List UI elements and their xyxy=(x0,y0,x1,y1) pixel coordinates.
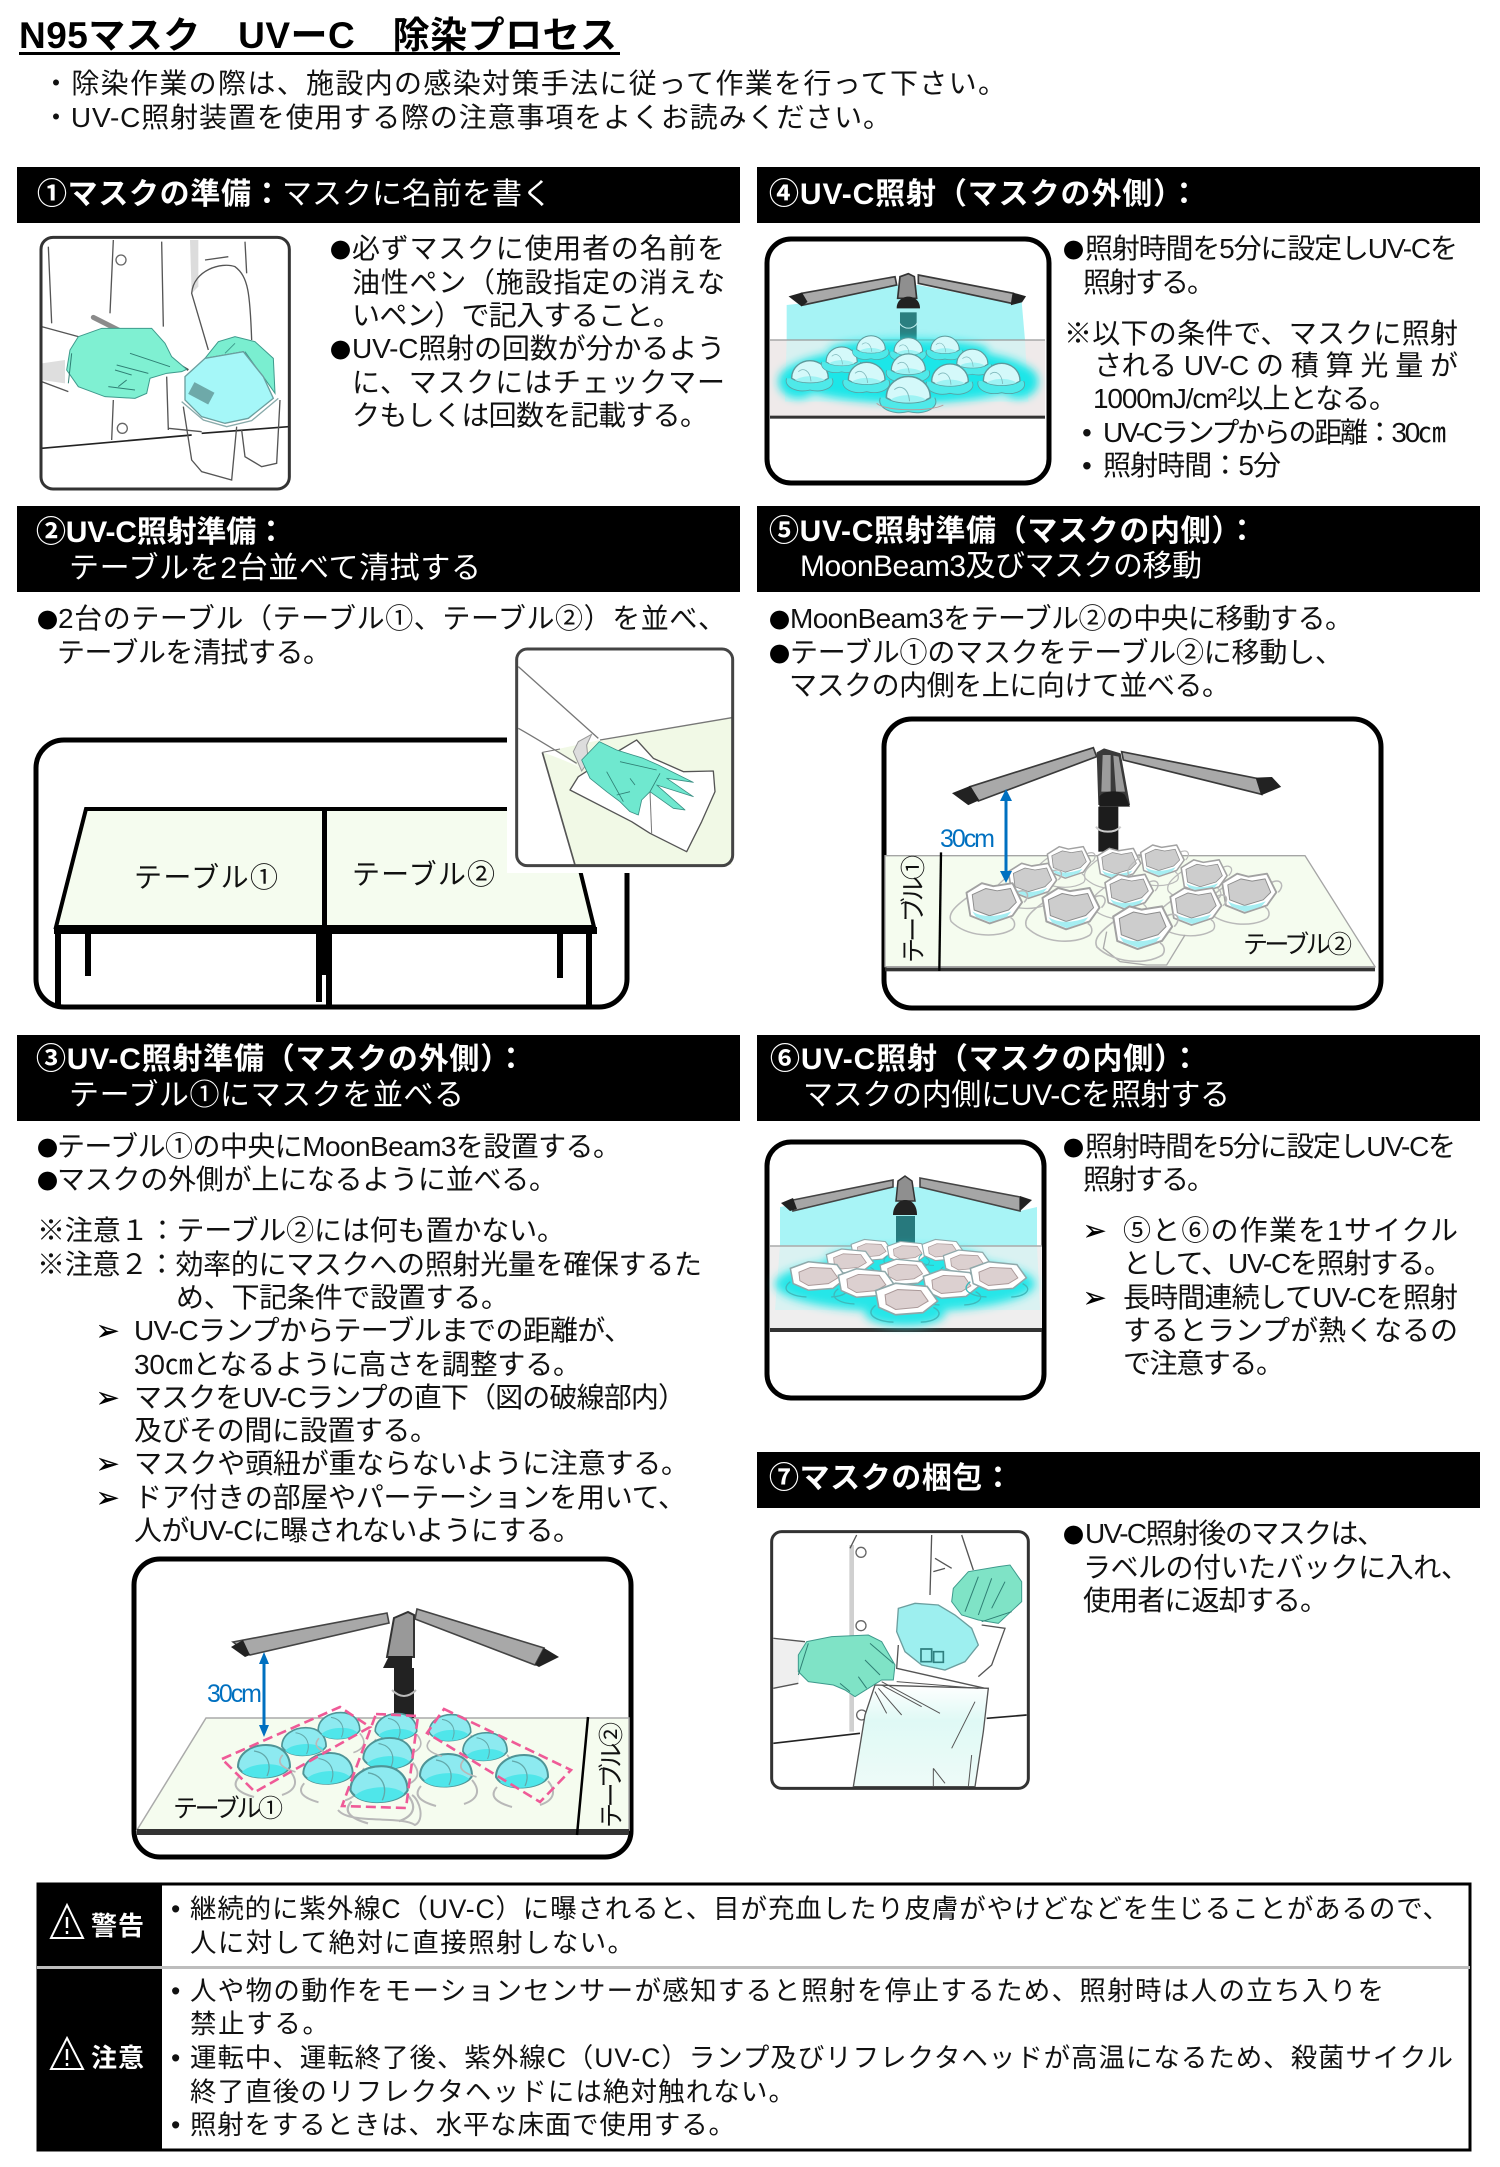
table 2 label xyxy=(577,1717,626,1835)
masks xyxy=(950,845,1282,965)
icon: hand writing on mask xyxy=(41,237,289,489)
lamp xyxy=(790,274,1025,308)
panel: step 1 header: ： xyxy=(252,178,282,211)
caution text: 終了直後のリフレクタヘッドには絶対触れない。 xyxy=(190,2077,795,2107)
step 3 instructions: UV-Cランプからテーブルまでの距離が、 xyxy=(134,1315,632,1346)
caution text: • xyxy=(171,2043,180,2073)
step 4 instructions: ● xyxy=(1063,235,1084,265)
step 3 instructions: ➢ xyxy=(96,1482,119,1513)
step 6 instructions: 長時間連続してUV-Cを照射 xyxy=(1123,1282,1458,1313)
step 7 instructions: ラベルの付いたバックに入れ、 xyxy=(1083,1552,1469,1583)
panel: step 1 header: マスクに名前を書く xyxy=(282,178,552,211)
step 7 instructions: 使用者に返却する。 xyxy=(1083,1585,1328,1616)
caution text: 照射をするときは、水平な床面で使用する。 xyxy=(190,2110,735,2140)
lamp xyxy=(231,1609,559,1718)
step 4 instructions: 照射時間を5分に設定しUV-Cを xyxy=(1085,233,1458,264)
step 3 instructions: マスクや頭紐が重ならないように注意する。 xyxy=(134,1448,689,1479)
dashed placement zones xyxy=(222,1707,571,1808)
step 3 instructions: め、下記条件で設置する。 xyxy=(176,1282,509,1313)
step 3 instructions: テーブル①の中央にMoonBeam3を設置する。 xyxy=(57,1131,621,1162)
step 1 instructions xyxy=(330,233,725,431)
step 1 instructions: いペン）で記入すること。 xyxy=(352,300,681,331)
diagram: two tables xyxy=(36,740,627,1007)
step 1 instructions: ● xyxy=(330,235,351,265)
step 6 instructions: するとランプが熱くなるの xyxy=(1123,1315,1458,1346)
intro notes xyxy=(42,68,1006,133)
panel: step 4 header xyxy=(757,167,1480,223)
step 4 instructions: 照射する。 xyxy=(1083,267,1215,298)
diagram: masks inner side on table 2 xyxy=(884,719,1381,1008)
step 6 instructions: 照射する。 xyxy=(1083,1164,1215,1195)
diagram: UV-C inner irradiation xyxy=(767,1142,1044,1398)
step 2 instructions xyxy=(37,603,726,668)
step 3 instructions: ➢ xyxy=(96,1315,119,1346)
panel: step 4 header: ④UV-C照射（マスクの外側）： xyxy=(769,178,1199,211)
step 7 instructions: UV-C照射後のマスクは、 xyxy=(1085,1518,1385,1549)
step 1 instructions: ● xyxy=(330,335,351,365)
lamp xyxy=(953,748,1280,852)
step 3 instructions: ※注意１：テーブル②には何も置かない。 xyxy=(37,1215,565,1246)
step 4 instructions: ※以下の条件で、マスクに照射 xyxy=(1064,318,1458,349)
step 5 instructions: マスクの内側を上に向けて並べる。 xyxy=(789,670,1230,701)
caution text: • xyxy=(171,2110,180,2140)
step 4 instructions: される UV-C の 積 算 光 量 が xyxy=(1094,350,1458,381)
warning and caution table xyxy=(37,1883,1470,2151)
step 3 instructions: ➢ xyxy=(96,1448,119,1479)
warning text: 継続的に紫外線C（UV-C）に曝されると、目が充血したり皮膚がやけどなどを生じることがあるので、 xyxy=(190,1894,1449,1924)
glow xyxy=(778,339,1038,403)
caution label xyxy=(51,2038,144,2073)
panel: step 6 header xyxy=(757,1035,1480,1121)
table 1 label: テーブル① xyxy=(900,855,928,963)
table 2 label: テーブル② xyxy=(598,1722,626,1828)
distance label: 30cm xyxy=(207,1680,262,1708)
icon: wiping table by hand xyxy=(507,640,739,873)
step 2 instructions: 2台のテーブル（テーブル①、テーブル②）を並べ、 xyxy=(58,603,726,634)
step 4 instructions: 1000mJ/cm²以上となる。 xyxy=(1093,383,1397,414)
caution label: 注意 xyxy=(91,2043,144,2073)
step 6 instructions: ⑤と⑥の作業を1サイクル xyxy=(1123,1215,1458,1246)
step 4 instructions: • xyxy=(1082,450,1092,481)
icon: packing mask into bag xyxy=(772,1532,1028,1788)
panel: step 3 header xyxy=(17,1035,740,1121)
step 1 instructions: 必ずマスクに使用者の名前を xyxy=(352,233,725,264)
panel: step 3 header: テーブル①にマスクを並べる xyxy=(69,1079,464,1112)
step 5 instructions xyxy=(769,603,1353,701)
diagram: masks outer side on table 1 xyxy=(134,1559,631,1857)
intro notes: ・UV-C照射装置を使用する際の注意事項をよくお読みください。 xyxy=(42,102,891,133)
panel: step 5 header: ⑤UV-C照射準備（マスクの内側）： xyxy=(769,515,1257,548)
table 2 label: テーブル② xyxy=(352,859,495,890)
title: N95マスク UVーC 除染プロセス xyxy=(19,15,617,56)
panel: step 2 header: ②UV-C照射準備： xyxy=(36,516,286,549)
warning text: • xyxy=(171,1894,180,1924)
step 5 instructions: ● xyxy=(769,605,790,635)
step 3 instructions: 及びその間に設置する。 xyxy=(134,1415,438,1446)
panel: step 1 header xyxy=(17,167,740,223)
warning text xyxy=(171,1894,1449,1958)
step 3 instructions: ➢ xyxy=(96,1382,119,1413)
step 3 instructions: 人がUV-Cに曝されないようにする。 xyxy=(134,1515,581,1546)
step 3 instructions: ● xyxy=(37,1166,58,1196)
warning label xyxy=(51,1905,144,1941)
step 3 instructions xyxy=(37,1131,702,1546)
glow xyxy=(775,1247,1035,1326)
table 1 label: テーブル① xyxy=(173,1795,283,1823)
table 2 label: テーブル② xyxy=(1243,931,1352,959)
step 5 instructions: ● xyxy=(769,639,790,669)
step 6 instructions: で注意する。 xyxy=(1123,1348,1284,1379)
step 6 instructions: ➢ xyxy=(1083,1215,1106,1246)
caution text: 人や物の動作をモーションセンサーが感知すると照射を停止するため、照射時は人の立ち入りを xyxy=(190,1976,1384,2006)
warning label: 警告 xyxy=(91,1911,144,1941)
step 6 instructions: ● xyxy=(1063,1133,1084,1163)
intro notes: ・除染作業の際は、施設内の感染対策手法に従って作業を行って下さい。 xyxy=(42,68,1006,99)
panel: step 5 header xyxy=(757,506,1480,592)
step 7 instructions xyxy=(1063,1518,1469,1616)
panel: step 6 header: マスクの内側にUV-Cを照射する xyxy=(803,1079,1230,1112)
table 1 label: テーブル① xyxy=(134,862,278,893)
panel: step 3 header: ③UV-C照射準備（マスクの外側）： xyxy=(36,1043,526,1076)
panel: step 7 header: ⑦マスクの梱包： xyxy=(769,1462,1013,1495)
step 3 instructions: ● xyxy=(37,1133,58,1163)
step 2 instructions: ● xyxy=(37,605,58,635)
step 3 instructions: マスクをUV-Cランプの直下（図の破線部内） xyxy=(134,1382,686,1413)
lamp xyxy=(781,1176,1032,1215)
caution text: 運転中、運転終了後、紫外線C（UV-C）ランプ及びリフレクタヘッドが高温になるため、殺菌サイクル xyxy=(190,2043,1453,2073)
step 3 instructions: マスクの外側が上になるように並べる。 xyxy=(57,1164,557,1195)
step 4 instructions: UV-Cランプからの距離：30㎝ xyxy=(1103,417,1446,448)
caution text: 禁止する。 xyxy=(190,2009,329,2039)
step 1 instructions: UV-C照射の回数が分かるよう xyxy=(352,333,725,364)
panel: step 2 header xyxy=(17,506,740,592)
panel: step 5 header: MoonBeam3及びマスクの移動 xyxy=(800,550,1202,583)
panel: step 6 header: ⑥UV-C照射（マスクの内側）： xyxy=(770,1043,1200,1076)
step 3 instructions: ※注意２：効率的にマスクへの照射光量を確保するた xyxy=(37,1249,702,1280)
step 1 instructions: 油性ペン（施設指定の消えな xyxy=(352,267,725,298)
panel: step 2 header: テーブルを2台並べて清拭する xyxy=(69,552,481,585)
step 7 instructions: ● xyxy=(1063,1520,1084,1550)
step 4 instructions: • xyxy=(1082,417,1092,448)
step 4 instructions xyxy=(1063,233,1458,481)
panel: step 7 header xyxy=(757,1452,1480,1508)
caution text: • xyxy=(171,1976,180,2006)
masks xyxy=(786,1240,1028,1322)
masks xyxy=(236,1713,553,1825)
arrow: 30cm distance xyxy=(259,1652,269,1737)
diagram: UV-C outer irradiation xyxy=(767,239,1049,483)
step 5 instructions: MoonBeam3をテーブル②の中央に移動する。 xyxy=(790,603,1353,634)
step 5 instructions: テーブル①のマスクをテーブル②に移動し、 xyxy=(790,637,1343,668)
step 4 instructions: 照射時間：5分 xyxy=(1103,450,1281,481)
step 1 instructions: に、マスクにはチェックマー xyxy=(352,367,725,398)
step 3 instructions: ドア付きの部屋やパーテーションを用いて、 xyxy=(134,1482,686,1513)
step 2 instructions: テーブルを清拭する。 xyxy=(57,637,331,668)
masks xyxy=(786,336,1025,413)
warning text: 人に対して絶対に直接照射しない。 xyxy=(190,1928,634,1958)
step 6 instructions: ➢ xyxy=(1083,1282,1106,1313)
step 6 instructions: 照射時間を5分に設定しUV-Cを xyxy=(1085,1131,1456,1162)
arrow: 30cm distance xyxy=(1000,789,1012,883)
distance label: 30cm xyxy=(940,825,995,853)
step 6 instructions xyxy=(1063,1131,1458,1379)
step 1 instructions: クもしくは回数を記載する。 xyxy=(352,400,708,431)
step 6 instructions: として、UV-Cを照射する。 xyxy=(1123,1248,1452,1279)
step 3 instructions: 30㎝となるように高さを調整する。 xyxy=(134,1349,581,1380)
panel: step 1 header: ①マスクの準備 xyxy=(37,178,251,211)
caution text xyxy=(171,1976,1453,2140)
